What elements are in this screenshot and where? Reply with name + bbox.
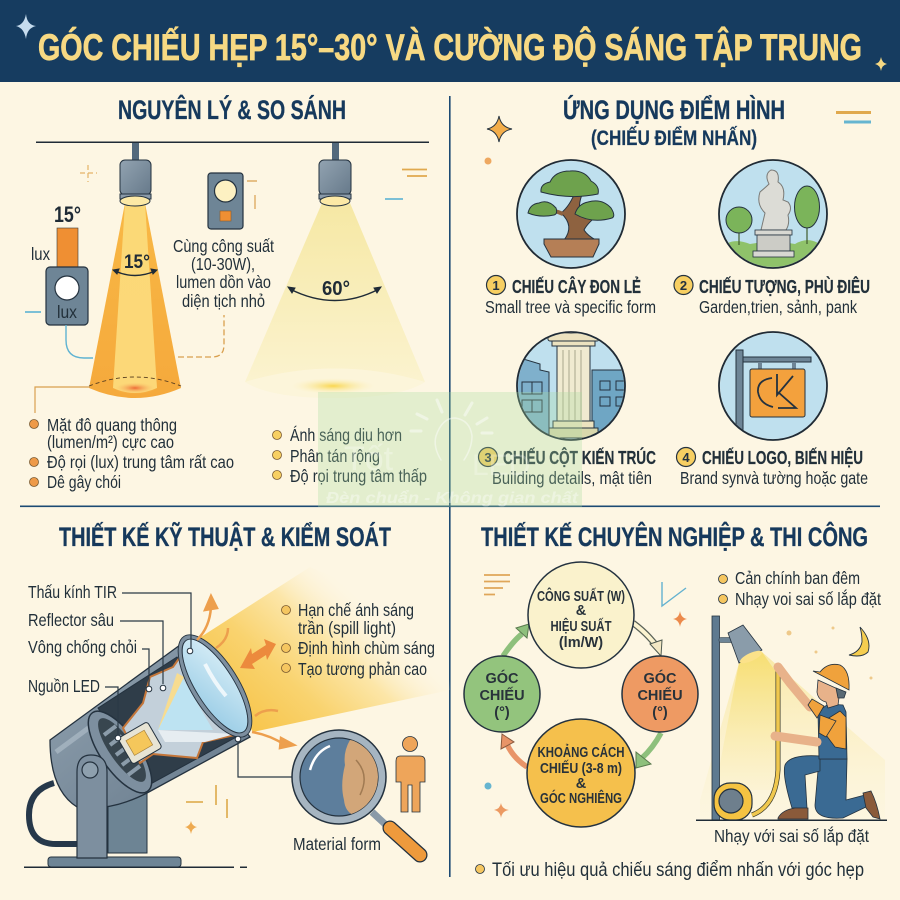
back boot: [863, 791, 880, 819]
deco lines teal: [844, 120, 871, 124]
decorative marks: [80, 165, 97, 182]
bullets narrow beam: Độ rọi (lux) trung tâm rất cao: [47, 452, 234, 472]
overalls: [818, 704, 847, 759]
deco teal line: [385, 198, 403, 200]
icon ring 4: [719, 332, 827, 440]
labels: Reflector sâu: [28, 610, 114, 630]
rear bracket: [108, 778, 147, 853]
ceiling rail: [36, 142, 429, 143]
bullets wide beam: Phân tán rộng: [290, 446, 380, 466]
heading: ỨNG DỤNG ĐIỂM HÌNH: [563, 94, 785, 125]
lens ring: [164, 624, 266, 748]
bullets: Tạo tương phản cao: [298, 659, 427, 679]
deco lines: [836, 111, 871, 114]
deco sensor ticks: [247, 181, 257, 209]
watermark: Đèn chuẩn - Không gian chất: [326, 490, 579, 507]
item 4: [676, 447, 868, 488]
sensor box: [208, 173, 243, 229]
base plate: [24, 857, 247, 868]
text: cung cong suat: (10-30W),: [191, 254, 255, 274]
circle: goc chieu left: (°): [494, 705, 510, 721]
circle: cong suat: CÔNG SUẤT (W): [537, 587, 625, 605]
shoulder sleeve: [808, 699, 824, 718]
inner light: [715, 652, 778, 790]
labels: Vông chống chỏi: [28, 637, 137, 657]
bullets: Hạn chế ánh sáng: [298, 600, 414, 620]
dot: [484, 158, 492, 164]
lux meter: lux: [31, 244, 50, 264]
item 1: Small tree và specific form: [485, 297, 656, 317]
circle: goc chieu right: (°): [652, 705, 668, 721]
circle: goc chieu left: GÓC: [485, 669, 519, 687]
item 3: CHIẾU CỘT KIẾN TRÚC: [503, 447, 656, 468]
caption: Nhạy với sai số lắp đặt: [714, 825, 869, 846]
front boot: [778, 808, 808, 819]
connector teal: [66, 325, 93, 358]
bullets narrow beam: Dê gây chói: [47, 472, 121, 492]
deco stars: [786, 626, 872, 680]
deco marks: [186, 785, 227, 818]
icon: star: [487, 116, 512, 142]
label 60 degree: 60°: [322, 278, 350, 300]
item 1: 1: [492, 278, 500, 293]
spot lamp body: [50, 645, 250, 808]
watermark: LED: [472, 449, 530, 482]
bullets narrow beam: Mặt đô quang thông: [47, 415, 177, 435]
heading: NGUYÊN LÝ & SO SÁNH: [118, 94, 346, 125]
icon: double arrow: [240, 639, 276, 669]
bullets narrow beam: (lumen/m²) cực cao: [47, 432, 174, 452]
bullets: Định hình chùm sáng: [298, 638, 435, 658]
tick teal: [25, 311, 41, 313]
circle: goc chieu left: [464, 656, 540, 732]
elbow sleeve: [819, 715, 836, 737]
worker: [775, 664, 880, 819]
labels: Thấu kính TIR: [28, 582, 117, 602]
watermark: [318, 392, 582, 507]
heading: THIẾT KẾ KỸ THUẬT & KIỂM SOÁT: [59, 521, 391, 552]
item 4: 4: [682, 450, 690, 465]
raised arm: [778, 667, 810, 707]
bullets: [282, 600, 435, 679]
lux meter: 15°: [54, 202, 81, 227]
deco star bottom: [494, 803, 509, 818]
lower arm: [775, 736, 817, 742]
text: cung cong suat: [173, 236, 274, 311]
item 3: [478, 447, 656, 488]
front leg: [784, 756, 820, 808]
deco dot: [484, 782, 492, 790]
callout dots: [115, 648, 241, 742]
header banner: [0, 0, 900, 82]
lux meter: [31, 202, 88, 325]
spill arrows: [197, 596, 294, 748]
back leg: [815, 759, 866, 818]
icon: column: [518, 333, 624, 439]
watermark: Tốt: [344, 440, 394, 478]
circle: cong suat: HIỆU SUẤT: [550, 617, 612, 635]
circle: khoang cach: CHIẾU (3-8 m): [540, 760, 622, 777]
circle: goc chieu right: GÓC: [643, 669, 677, 687]
labels: Nguồn LED: [28, 676, 100, 696]
icon ring 3: [517, 332, 625, 440]
circle: khoang cach: KHOẢNG CÁCH: [538, 744, 624, 761]
ground: [696, 820, 887, 821]
icon: magnifier: [292, 730, 420, 855]
circle: goc chieu right: [622, 656, 698, 732]
hard hat: [813, 664, 849, 690]
item 1: CHIẾU CÂY ĐON LẺ: [512, 276, 641, 297]
panel: nguyen ly & so sanh: [25, 94, 429, 492]
wide beam 60 degree: [245, 203, 425, 398]
light beam: [193, 567, 450, 732]
circle: khoang cach: [527, 719, 635, 827]
text: cung cong suat: diện tịch nhỏ: [182, 291, 265, 311]
deco star: [673, 611, 687, 627]
circle: cong suat: [528, 562, 634, 668]
item 2: Garden,trien, sảnh, pank: [699, 297, 857, 317]
icon: bonsai: [517, 160, 625, 268]
circle: khoang cach: GÓC NGHIÊNG: [540, 789, 622, 807]
subheading: (CHIẾU ĐIỂM NHẤN): [591, 127, 757, 150]
item 2: [674, 276, 870, 317]
pole lamp outer light: [700, 652, 885, 820]
callout lines: [105, 593, 293, 777]
cable: [29, 783, 108, 844]
shirt: [824, 711, 846, 749]
pole lamp: [712, 616, 764, 820]
tape measure: [714, 664, 778, 820]
panel: thiet ke chuyen nghiep: [464, 521, 887, 881]
icon: person: [396, 736, 425, 812]
bullets wide beam: [272, 425, 427, 486]
text: cung cong suat: lumen dồn vào: [176, 272, 271, 292]
icon: sparkle right: [875, 57, 887, 71]
connector orange: [35, 387, 90, 413]
circle: goc chieu right: CHIẾU: [637, 687, 683, 704]
icon: statue: [719, 160, 827, 270]
icon: signboard: [719, 332, 827, 440]
icon ring 1: [517, 160, 625, 268]
bullets wide beam: Ánh sáng dịu hơn: [290, 425, 402, 445]
deco chart: [662, 582, 686, 606]
lamp narrow: [120, 143, 151, 206]
hair: [836, 688, 846, 698]
bullets: [718, 568, 881, 609]
item 3: 3: [484, 450, 492, 465]
circle: goc chieu left: CHIẾU: [479, 687, 525, 704]
icon: moon: [849, 627, 869, 656]
labels: [28, 582, 137, 696]
bullets narrow beam: [30, 415, 234, 492]
deco lines: [484, 575, 510, 594]
item 2: 2: [680, 278, 687, 293]
bracket: [77, 755, 107, 858]
label 60 degree: [288, 278, 381, 300]
circle: khoang cach: &: [576, 776, 587, 792]
bullets: Cản chính ban đêm: [735, 568, 860, 588]
icon ring 2: [719, 160, 827, 268]
narrow beam 15 degree: [89, 203, 181, 398]
text: cung cong suat: Cùng công suất: [173, 236, 274, 256]
item 3: Building details, mật tiên: [492, 468, 652, 488]
panel: ung dung diem hinh: [478, 94, 871, 488]
circle: cong suat: &: [576, 603, 587, 619]
lux meter: lux: [57, 302, 77, 322]
bullets: trần (spill light): [298, 618, 396, 638]
label 15 degree: 15°: [124, 252, 150, 273]
cycle arrows: [501, 623, 662, 768]
deco lines right: [402, 170, 427, 176]
dashed connector: [178, 315, 224, 357]
label 15 degree: [113, 252, 157, 276]
bullets wide beam: Độ rọi trung tâm thấp: [290, 466, 427, 486]
item 1: [485, 276, 656, 317]
neck head: [817, 680, 840, 708]
panel: thiet ke ky thuat: [24, 521, 450, 868]
icon: sparkle left: [16, 14, 36, 39]
deco star: [185, 821, 197, 834]
lamp wide: [319, 143, 351, 206]
text: material form: Material form: [293, 834, 381, 854]
circle: cong suat: (lm/W): [559, 635, 603, 651]
